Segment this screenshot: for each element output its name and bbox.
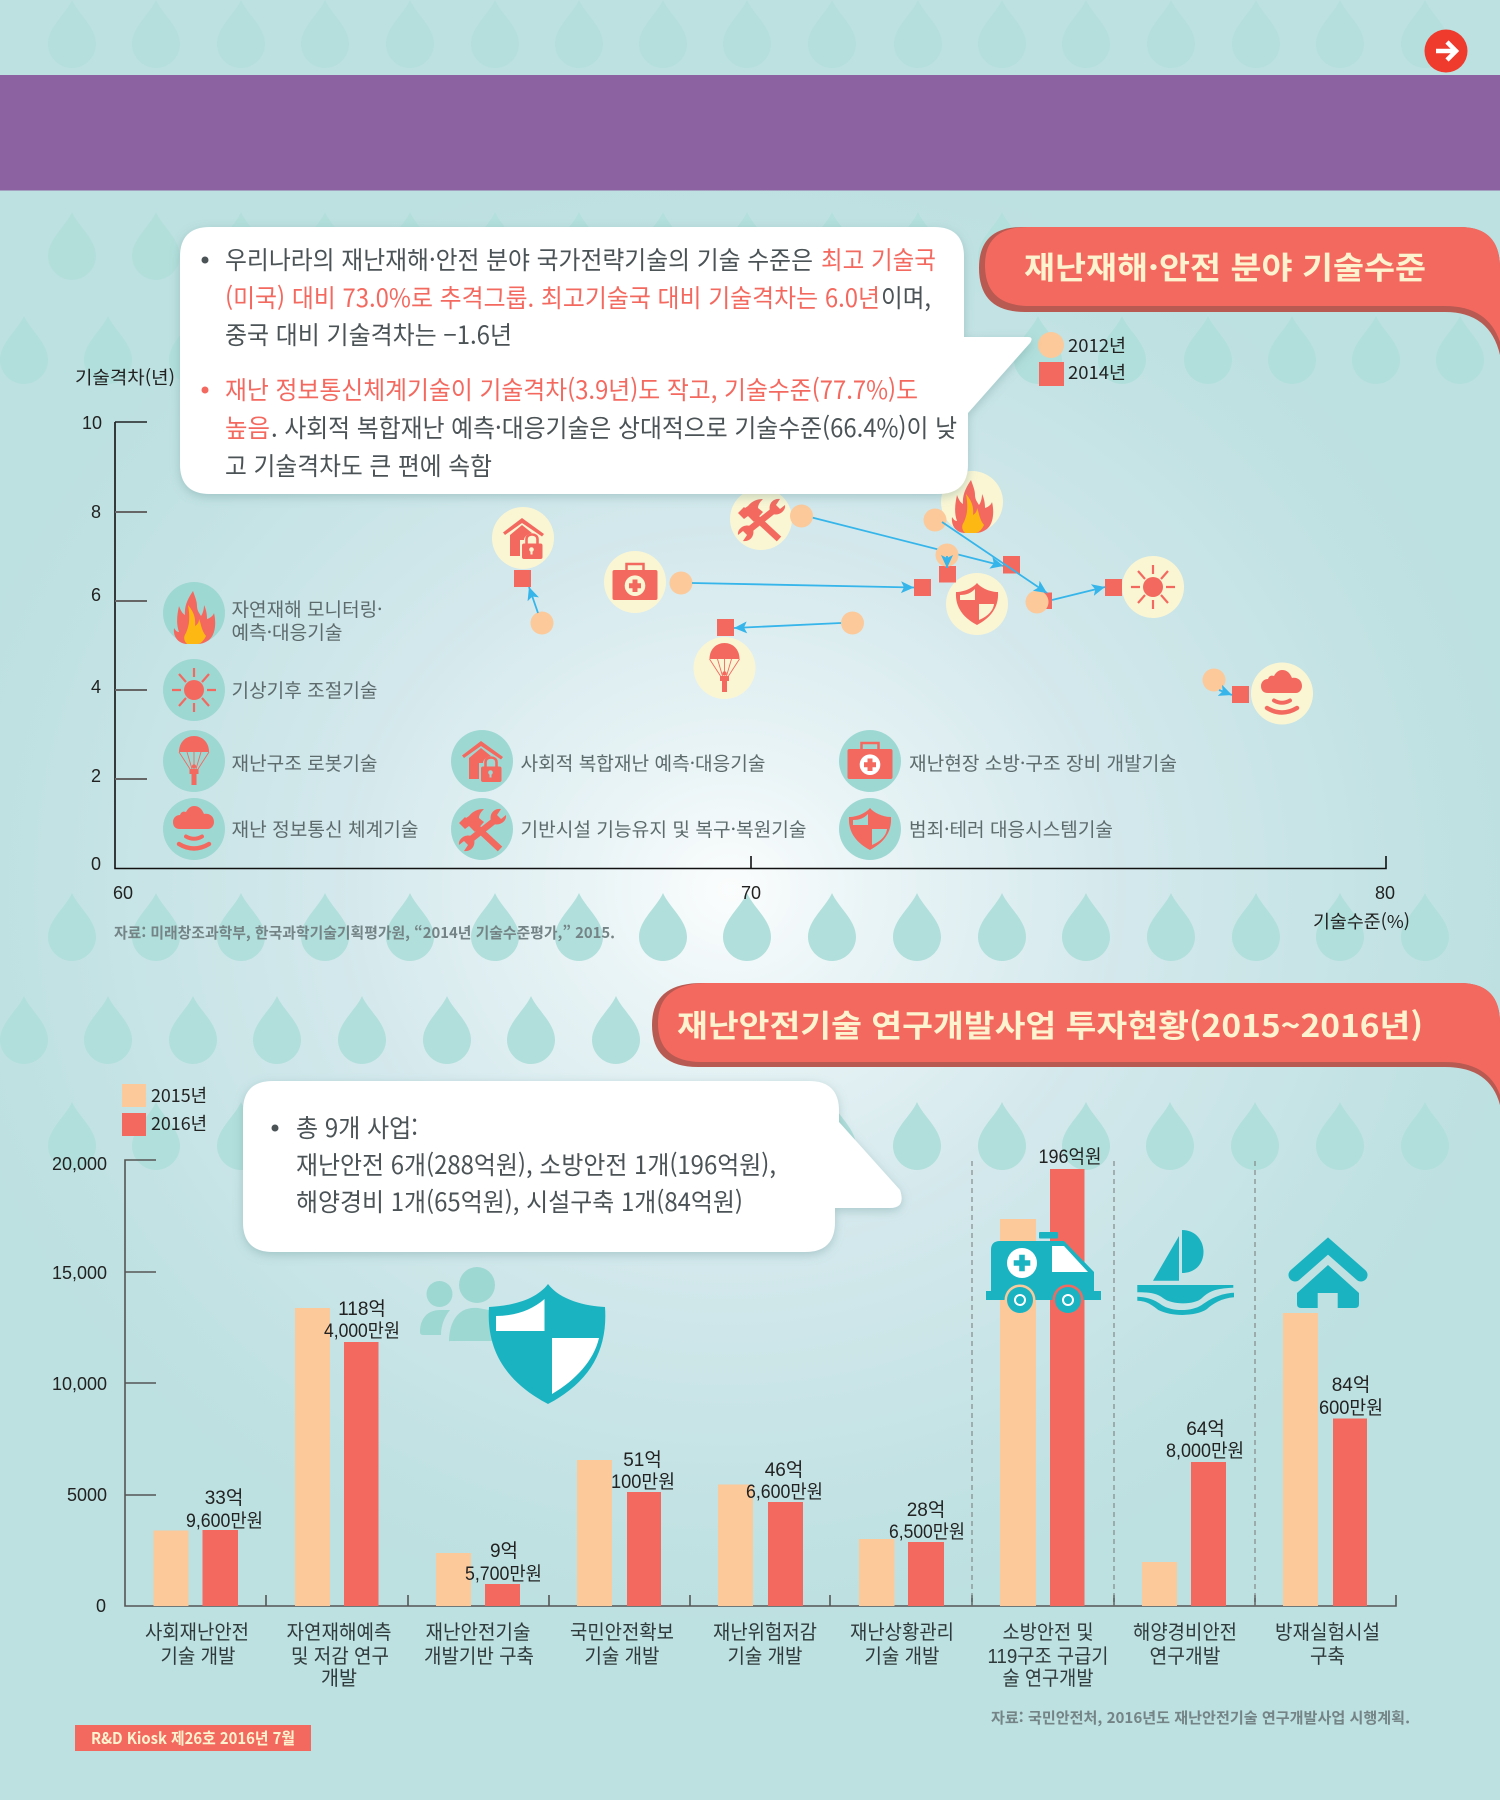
legend item: parachute: 재난구조 로봇기술 xyxy=(232,749,378,776)
legend item: kit: 재난현장 소방·구조 장비 개발기술 xyxy=(909,749,1177,776)
y axis labels xyxy=(82,413,102,874)
category labels: 방재실험시설 xyxy=(1275,1621,1380,1644)
y axis labels: 2 xyxy=(91,766,101,786)
bullet text 1: 중국 대비 기술격차는 −1.6년 xyxy=(225,316,512,352)
legend item: house xyxy=(451,730,766,792)
legend: years: 2012년 xyxy=(1068,332,1126,358)
source note 1: 자료: 미래창조과학부, 한국과학기술기획평가원, “2014년 기술수준평가,” 2015. xyxy=(114,922,615,943)
legend item: kit xyxy=(839,730,1177,792)
y axis title: 기술격차(년) xyxy=(75,364,175,390)
category labels: 개발 xyxy=(321,1667,357,1690)
value labels: 4,000만원 xyxy=(324,1320,400,1342)
legend item: cloud: 재난 정보통신 체계기술 xyxy=(232,815,418,842)
callout: nine projects summary xyxy=(243,1081,902,1252)
category labels: 재난위험저감 xyxy=(713,1621,817,1644)
x axis labels xyxy=(113,883,1395,903)
legend item: cloud xyxy=(163,798,418,860)
value labels: 9,600만원 xyxy=(186,1510,263,1532)
movement arrows xyxy=(529,522,1232,695)
bullet text 2 xyxy=(202,371,957,483)
callout text: 총 9개 사업: xyxy=(296,1109,418,1145)
value labels: 9억 xyxy=(490,1540,518,1562)
y axis labels: 6 xyxy=(91,585,101,605)
bars 2016 xyxy=(202,1169,1367,1606)
x axis labels: 70 xyxy=(741,883,761,903)
x axis labels: 80 xyxy=(1375,883,1395,903)
source note 2: 자료: 국민안전처, 2016년도 재난안전기술 연구개발사업 시행계획. xyxy=(991,1707,1410,1728)
publication badge: R&D Kiosk 제26호 2016년 7월 xyxy=(91,1725,295,1749)
x axis title: 기술수준(%) xyxy=(1313,908,1410,934)
legend: years: 2015년 xyxy=(151,1082,207,1108)
legend item: shield xyxy=(839,798,1113,860)
value labels: 196억원 xyxy=(1038,1146,1102,1168)
bullet text 1: 최고 기술국 xyxy=(821,241,936,277)
category labels: 국민안전확보 xyxy=(570,1621,674,1644)
y axis labels: 0 xyxy=(96,1596,106,1616)
y axis labels: 15,000 xyxy=(52,1263,107,1283)
legend item: fire: 예측·대응기술 xyxy=(232,618,342,645)
category labels: 자연재해예측 xyxy=(286,1621,392,1644)
heading ribbon 1 xyxy=(979,227,1500,355)
category labels: 개발기반 구축 xyxy=(424,1645,534,1668)
icon: sailboat xyxy=(1137,1230,1234,1315)
category labels: 구축 xyxy=(1310,1645,1345,1668)
bullet text 2: 높음 xyxy=(225,409,270,445)
background water drops xyxy=(0,0,1484,1170)
y axis labels: 5000 xyxy=(67,1485,107,1505)
icon: next arrow button xyxy=(1424,30,1468,72)
value labels: 600만원 xyxy=(1319,1397,1383,1419)
bullet text 1: (미국) 대비 73.0%로 추격그룹. 최고기술국 대비 기술격차는 6.0년 xyxy=(225,279,880,315)
bars 2015 xyxy=(154,1219,1318,1606)
legend: years: 2016년 xyxy=(151,1110,207,1136)
category labels xyxy=(145,1621,1380,1690)
bullet text 1: 이며, xyxy=(881,279,931,315)
value labels: 51억 xyxy=(623,1449,662,1471)
x axis labels: 60 xyxy=(113,883,133,903)
legend: years xyxy=(1038,332,1126,386)
legend item: house: 사회적 복합재난 예측·대응기술 xyxy=(520,749,766,776)
y axis labels: 8 xyxy=(91,502,101,522)
callout text xyxy=(272,1109,776,1219)
value labels: 118억 xyxy=(338,1298,386,1320)
value labels: 8,000만원 xyxy=(1166,1440,1244,1462)
scatter chart: technology level vs gap xyxy=(75,332,1410,934)
category labels: 술 연구개발 xyxy=(1002,1667,1094,1690)
bullet text 2: 고 기술격차도 큰 편에 속함 xyxy=(225,447,492,483)
y axis labels xyxy=(52,1154,107,1616)
2012 markers xyxy=(530,504,1226,692)
bullet text 1 xyxy=(202,241,936,352)
value labels: 6,500만원 xyxy=(889,1521,965,1543)
category labels: 기술 개발 xyxy=(864,1645,940,1668)
value labels: 64억 xyxy=(1186,1418,1225,1440)
arrow: tools shift xyxy=(812,518,1004,566)
legend item: fire xyxy=(163,582,382,645)
category labels: 연구개발 xyxy=(1150,1645,1220,1668)
value labels xyxy=(186,1146,1383,1585)
category labels: 기술 개발 xyxy=(584,1645,660,1668)
heading ribbon 2 xyxy=(652,983,1500,1105)
category labels: 해양경비안전 xyxy=(1133,1621,1237,1644)
legend item: shield: 범죄·테러 대응시스템기술 xyxy=(909,815,1113,842)
category labels: 소방안전 및 xyxy=(1002,1621,1094,1644)
chart axes xyxy=(115,422,1386,868)
value labels: 100만원 xyxy=(611,1471,675,1493)
category labels: 119구조 구급기 xyxy=(988,1645,1108,1668)
legend item: fire: 자연재해 모니터링· xyxy=(232,595,382,622)
legend item: tools: 기반시설 기능유지 및 복구·복원기술 xyxy=(520,815,806,842)
icon: house xyxy=(1295,1246,1361,1308)
legend: years xyxy=(122,1082,207,1136)
y axis labels: 0 xyxy=(91,854,101,874)
2014 markers xyxy=(514,556,1249,703)
heading ribbon 1: 재난재해·안전 분야 기술수준 xyxy=(1024,243,1426,288)
value labels: 46억 xyxy=(765,1459,803,1481)
legend item: sun xyxy=(163,659,378,721)
bullet text 2: . 사회적 복합재난 예측·대응기술은 상대적으로 기술수준(66.4%)이 낮 xyxy=(271,409,957,445)
bullet text 1: 우리나라의 재난재해·안전 분야 국가전략기술의 기술 수준은 xyxy=(225,241,813,277)
value labels: 84억 xyxy=(1332,1374,1370,1396)
callout text: 재난안전 6개(288억원), 소방안전 1개(196억원), xyxy=(296,1146,776,1182)
scatter icons xyxy=(492,471,1313,724)
legend item: sun: 기상기후 조절기술 xyxy=(232,676,378,703)
callout: technology level summary xyxy=(180,227,1032,494)
legend item: parachute xyxy=(163,730,378,792)
axes xyxy=(125,1160,1396,1606)
legend: years: 2014년 xyxy=(1068,359,1126,385)
bullet text 2: 재난 정보통신체계기술이 기술격차(3.9년)도 작고, 기술수준(77.7%)도 xyxy=(225,371,918,407)
value labels: 6,600만원 xyxy=(746,1481,823,1503)
purple title band xyxy=(0,75,1500,190)
y axis labels: 4 xyxy=(91,677,101,697)
category labels: 재난안전기술 xyxy=(426,1621,530,1644)
y axis labels: 10 xyxy=(82,413,102,433)
legend item: tools xyxy=(451,798,806,860)
value labels: 5,700만원 xyxy=(465,1563,542,1585)
value labels: 28억 xyxy=(907,1499,945,1521)
icon legend xyxy=(163,582,1177,860)
category labels: 기술 개발 xyxy=(728,1645,802,1668)
icon: ambulance xyxy=(986,1232,1101,1316)
category labels: 재난상황관리 xyxy=(850,1621,954,1644)
category labels: 기술 개발 xyxy=(160,1645,236,1668)
y axis labels: 20,000 xyxy=(52,1154,107,1174)
callout text: 해양경비 1개(65억원), 시설구축 1개(84억원) xyxy=(296,1183,743,1219)
category labels: 사회재난안전 xyxy=(145,1621,249,1644)
y axis labels: 10,000 xyxy=(52,1374,107,1394)
category labels: 및 저감 연구 xyxy=(291,1645,389,1668)
icon: people with shield xyxy=(420,1267,605,1404)
value labels: 33억 xyxy=(205,1487,243,1509)
heading ribbon 2: 재난안전기술 연구개발사업 투자현황(2015~2016년) xyxy=(677,1001,1423,1046)
bar chart: R&D investment xyxy=(52,1082,1396,1690)
